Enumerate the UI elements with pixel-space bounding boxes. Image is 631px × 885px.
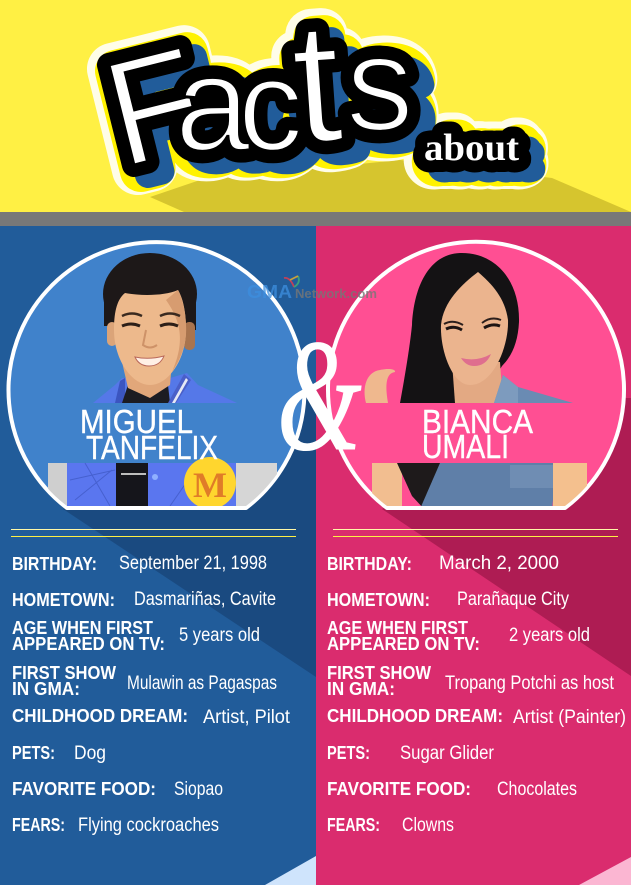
title: Facts about — [89, 0, 533, 209]
name: Miguel Tanfelix: TANFELIX — [86, 429, 218, 466]
fact: childhood dream: CHILDHOOD DREAM: — [12, 706, 188, 726]
name: Miguel Tanfelix — [80, 403, 218, 466]
sticker white border: s — [350, 12, 418, 163]
photo: Bianca upper — [365, 253, 573, 403]
watermark: GMANetwork.com: Network.com — [295, 287, 377, 301]
fact: hometown: Dasmariñas, Cavite — [134, 589, 276, 610]
sticker yellow band: about — [431, 133, 526, 175]
sticker black outline: s — [346, 8, 414, 159]
white title letters: s — [346, 8, 414, 159]
white title letters — [89, 0, 519, 199]
sticker black outline — [89, 0, 519, 199]
fact: favorite food: Chocolates — [497, 779, 577, 800]
name: Bianca Umali — [422, 403, 533, 465]
fact: age on TV: 5 years old — [179, 625, 260, 646]
sticker blue offset: F — [103, 24, 233, 209]
sticker white border: about — [428, 131, 523, 173]
fact: first show: FIRST SHOW — [327, 663, 431, 683]
fact: age on TV — [12, 618, 260, 654]
fact: birthday — [327, 553, 559, 574]
photo: Miguel lower — [48, 457, 277, 509]
fact: first show — [12, 663, 277, 699]
sticker blue offset: a — [189, 38, 265, 189]
fact: fears: Clowns — [402, 815, 454, 836]
fact: childhood dream — [12, 706, 291, 728]
fact: age on TV: AGE WHEN FIRST — [327, 618, 468, 638]
facts: Bianca — [327, 553, 626, 836]
fact: favorite food: FAVORITE FOOD: — [12, 779, 156, 799]
sticker black outline: about — [424, 127, 519, 169]
sticker yellow band — [96, 0, 526, 205]
fact: pets: Dog — [74, 743, 106, 764]
sticker white border: F — [93, 18, 223, 203]
fact: age on TV: APPEARED ON TV: — [12, 634, 165, 654]
sticker yellow band: a — [182, 34, 258, 185]
sticker black outline: a — [175, 28, 251, 179]
fact: fears: FEARS: — [12, 815, 65, 835]
sticker white border: c — [242, 36, 307, 182]
fact: childhood dream — [327, 706, 626, 728]
sticker black outline: c — [238, 32, 303, 178]
facts: Miguel — [12, 553, 291, 836]
sticker blue offset — [103, 0, 533, 209]
fact: birthday: BIRTHDAY: — [327, 554, 412, 574]
fact: hometown: HOMETOWN: — [327, 590, 430, 610]
panel: Bianca background — [316, 226, 631, 885]
fact: pets — [327, 743, 495, 764]
fact: first show: IN GMA: — [12, 679, 80, 699]
fact: hometown — [327, 589, 569, 610]
fact: fears — [327, 815, 454, 836]
watermark: GMANetwork.com: GMA — [247, 282, 292, 302]
grey divider strip — [0, 212, 631, 226]
fact: birthday — [12, 553, 267, 574]
white title letters: a — [175, 28, 251, 179]
fact: age on TV: AGE WHEN FIRST — [12, 618, 153, 638]
fact: pets — [12, 743, 106, 764]
fact: childhood dream: Artist, Pilot — [203, 707, 291, 728]
fact: favorite food: Siopao — [174, 779, 223, 800]
fact: pets: PETS: — [327, 743, 370, 763]
fact: pets: PETS: — [12, 743, 55, 763]
fact: first show: Mulawin as Pagaspas — [127, 673, 277, 694]
fact: birthday: March 2, 2000 — [439, 553, 559, 574]
watermark: GMANetwork.com — [247, 276, 377, 302]
sticker yellow band: F — [96, 20, 226, 205]
portrait circle: Miguel — [8, 242, 304, 509]
name: Miguel Tanfelix: MIGUEL — [80, 403, 193, 440]
rules: Bianca — [333, 529, 618, 537]
icon: GMA heart — [284, 276, 299, 287]
ampersand: & — [277, 306, 362, 484]
fact: fears: FEARS: — [327, 815, 380, 835]
fact: pets: Sugar Glider — [400, 743, 495, 764]
name: Bianca Umali: BIANCA — [422, 403, 533, 440]
fact: favorite food: FAVORITE FOOD: — [327, 779, 471, 799]
fact: first show: IN GMA: — [327, 679, 395, 699]
photo: Bianca lower — [372, 463, 587, 509]
rules: Miguel — [11, 529, 296, 537]
white title letters: about — [424, 127, 519, 169]
fact: fears — [12, 815, 219, 836]
sticker blue offset: c — [252, 42, 317, 188]
sticker blue offset: s — [360, 18, 428, 169]
fact: birthday: September 21, 1998 — [119, 553, 267, 574]
fact: favorite food — [327, 779, 577, 800]
fact: hometown: Parañaque City — [457, 589, 569, 610]
name: Bianca Umali: UMALI — [422, 428, 509, 465]
fact: fears: Flying cockroaches — [78, 815, 219, 836]
white title letters: c — [238, 32, 303, 178]
photo: Miguel upper — [93, 253, 237, 403]
panel: Miguel background — [0, 226, 316, 885]
fact: childhood dream: CHILDHOOD DREAM: — [327, 706, 503, 726]
fact: age on TV: 2 years old — [509, 625, 590, 646]
fact: age on TV: APPEARED ON TV: — [327, 634, 480, 654]
fact: age on TV — [327, 618, 590, 654]
sticker yellow band: s — [353, 14, 420, 165]
sticker white border — [93, 0, 523, 203]
sticker blue offset: about — [438, 137, 533, 179]
sticker blue offset: t — [300, 0, 361, 190]
fact: first show: FIRST SHOW — [12, 663, 116, 683]
portrait circle: Bianca — [328, 242, 624, 509]
sticker black outline: F — [89, 14, 219, 199]
fact: hometown — [12, 589, 276, 610]
sticker yellow band: c — [245, 38, 310, 184]
fact: hometown: HOMETOWN: — [12, 590, 115, 610]
Miguel hair — [103, 253, 197, 302]
white title letters: F — [89, 14, 219, 199]
fact: birthday: BIRTHDAY: — [12, 554, 97, 574]
header banner — [0, 0, 631, 212]
photo: Miguel lower: M — [193, 465, 227, 505]
fact: favorite food — [12, 779, 223, 800]
sticker white border: a — [179, 32, 255, 183]
fact: first show — [327, 663, 615, 699]
fact: childhood dream: Artist (Painter) — [513, 707, 626, 728]
